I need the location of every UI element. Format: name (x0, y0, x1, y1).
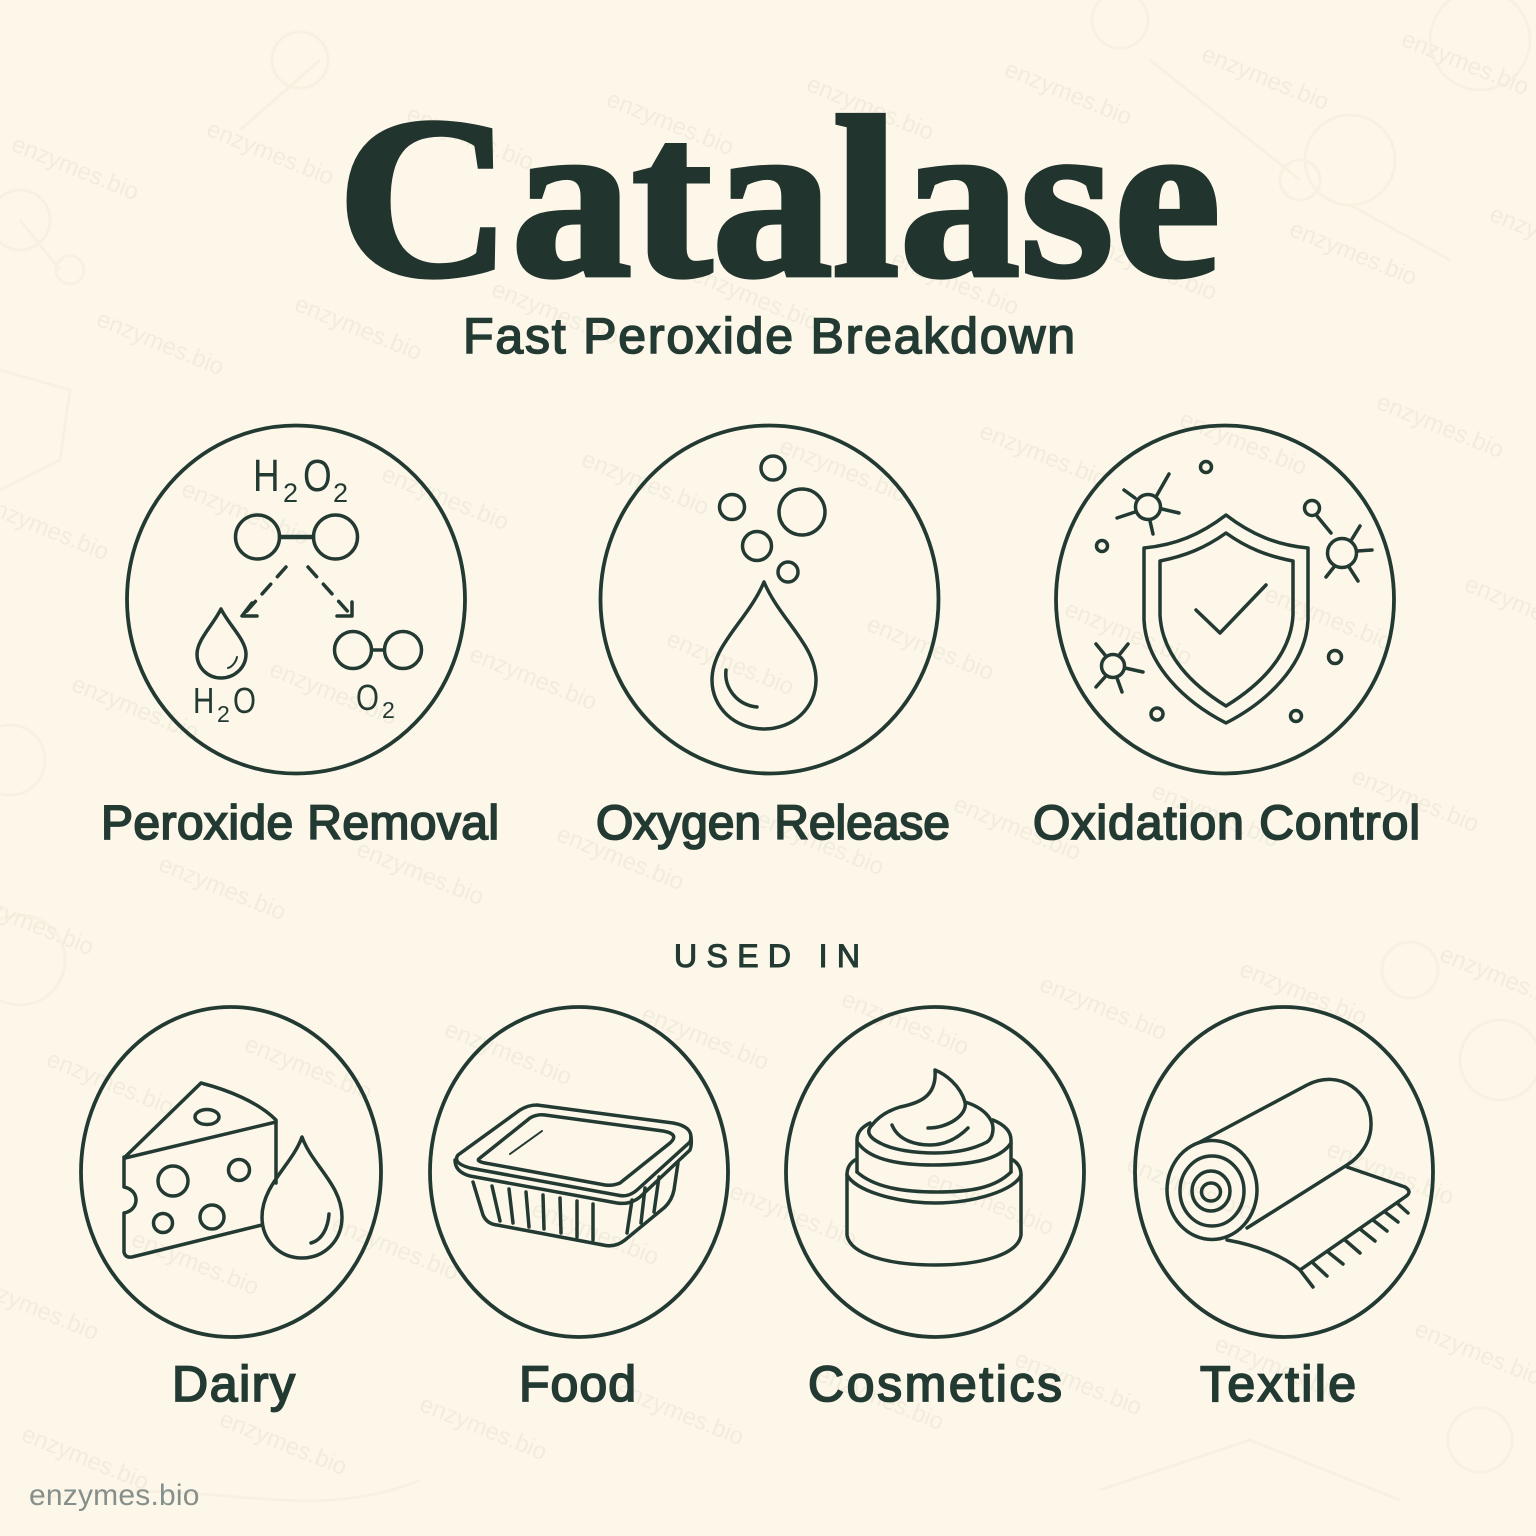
icon: peroxide breakdown diagram: 2 (382, 697, 395, 723)
watermark pattern: enzymes.bio (923, 1166, 1058, 1241)
watermark pattern: enzymes.bio (578, 446, 713, 521)
icon: droplet with bubbles (712, 456, 825, 729)
watermark pattern: enzymes.bio (1398, 26, 1533, 101)
watermark pattern: enzymes.bio (241, 1031, 376, 1106)
watermark pattern: enzymes.bio (155, 851, 290, 926)
panel: food (430, 1007, 728, 1337)
watermark pattern: enzymes.bio (1011, 1346, 1146, 1421)
watermark pattern: enzymes.bio (1148, 778, 1283, 853)
watermark pattern: enzymes.bio (613, 1376, 748, 1451)
watermark pattern: enzymes.bio (753, 806, 888, 881)
watermark pattern: enzymes.bio (976, 418, 1111, 493)
watermark pattern: enzymes.bio (43, 1046, 178, 1121)
watermark pattern: enzymes.bio (603, 86, 738, 161)
watermark pattern: enzymes.bio (813, 1361, 948, 1436)
label: oxygen release: Oxygen Release (596, 797, 950, 850)
subtitle: Fast Peroxide Breakdown (463, 308, 1075, 364)
watermark pattern: enzymes.bio (1001, 56, 1136, 131)
icon: food container (455, 1105, 691, 1246)
watermark pattern: enzymes.bio (353, 836, 488, 911)
watermark pattern: enzymes.bio (328, 1211, 463, 1286)
watermark pattern: enzymes.bio (1348, 763, 1483, 838)
watermark pattern: enzymes.bio (203, 116, 338, 191)
watermark pattern: enzymes.bio (663, 626, 798, 701)
watermark pattern: enzymes.bio (688, 261, 823, 336)
watermark pattern: enzymes.bio (416, 1391, 551, 1466)
panel: oxygen release (600, 426, 938, 774)
icon: cheese with droplet (124, 1083, 342, 1258)
watermark pattern: enzymes.bio (950, 791, 1085, 866)
icon: peroxide breakdown diagram: O (303, 451, 332, 501)
watermark pattern: enzymes.bio (1286, 216, 1421, 291)
watermark pattern: enzymes.bio (488, 276, 623, 351)
watermark pattern: enzymes.bio (178, 476, 313, 551)
title: Catalase (337, 70, 1221, 325)
watermark pattern: enzymes.bio (128, 1226, 263, 1301)
icon: cream jar (847, 1070, 1021, 1265)
icon: peroxide breakdown diagram: H (253, 451, 280, 501)
watermark pattern: enzymes.bio (1211, 1331, 1346, 1406)
icon: shield with check and microbes (1096, 462, 1372, 723)
watermark pattern: enzymes.bio (1036, 971, 1171, 1046)
watermark pattern: enzymes.bio (1086, 231, 1221, 306)
watermark pattern: enzymes.bio (93, 306, 228, 381)
brand footer: enzymes.bio (29, 1479, 200, 1512)
watermark pattern: enzymes.bio (528, 1196, 663, 1271)
panel: peroxide removal (127, 426, 465, 774)
watermark pattern: enzymes.bio (1176, 406, 1311, 481)
watermark pattern: enzymes.bio (1061, 596, 1196, 671)
icon: peroxide breakdown diagram: 2 (333, 478, 348, 508)
label: peroxide removal: Peroxide Removal (101, 797, 499, 850)
panel: textile (1135, 1007, 1433, 1337)
watermark pattern: enzymes.bio (553, 821, 688, 896)
watermark pattern: enzymes.bio (803, 71, 938, 146)
watermark pattern: enzymes.bio (68, 671, 203, 746)
watermark pattern: enzymes.bio (1123, 1151, 1258, 1226)
label: food: Food (519, 1356, 636, 1412)
watermark pattern: enzymes.bio (441, 1016, 576, 1091)
panel: oxidation control (1056, 426, 1394, 774)
panel: dairy (81, 1007, 381, 1337)
watermark pattern: enzymes.bio (1198, 41, 1333, 116)
label: cosmetics: Cosmetics (808, 1356, 1062, 1412)
icon: peroxide breakdown diagram: O (356, 677, 379, 718)
watermark pattern: enzymes.bio (291, 291, 426, 366)
icon: peroxide breakdown diagram: 2 (283, 478, 298, 508)
watermark pattern: enzymes.bio (216, 1406, 351, 1481)
watermark pattern: enzymes.bio (1373, 389, 1508, 464)
section heading: used in: USED IN (674, 938, 860, 974)
label: dairy: Dairy (172, 1356, 295, 1412)
watermark pattern: enzymes.bio (888, 246, 1023, 321)
watermark pattern: enzymes.bio (726, 1178, 861, 1253)
watermark pattern: enzymes.bio (403, 101, 538, 176)
watermark pattern: enzymes.bio (838, 986, 973, 1061)
watermark pattern: enzymes.bio (638, 1001, 773, 1076)
watermark pattern: enzymes.bio (8, 131, 143, 206)
watermark pattern: enzymes.bio (1323, 1136, 1458, 1211)
watermark pattern: enzymes.bio (18, 1421, 153, 1496)
watermark pattern: enzymes.bio (1261, 581, 1396, 656)
watermark pattern: enzymes.bio (266, 656, 401, 731)
label: oxidation control: Oxidation Control (1033, 797, 1420, 850)
icon: peroxide breakdown diagram (193, 451, 422, 727)
watermark pattern: enzymes.bio (466, 641, 601, 716)
panel: cosmetics (786, 1007, 1084, 1337)
icon: fabric roll (1167, 1079, 1409, 1287)
watermark pattern: enzymes.bio (863, 611, 998, 686)
icon: peroxide breakdown diagram: O (233, 680, 256, 721)
watermark pattern: enzymes.bio (776, 433, 911, 508)
watermark pattern: enzymes.bio (378, 461, 513, 536)
icon: peroxide breakdown diagram: 2 (217, 701, 230, 727)
watermark pattern: enzymes.bio (1236, 956, 1371, 1031)
icon: peroxide breakdown diagram: H (193, 680, 214, 721)
label: textile: Textile (1200, 1356, 1356, 1412)
